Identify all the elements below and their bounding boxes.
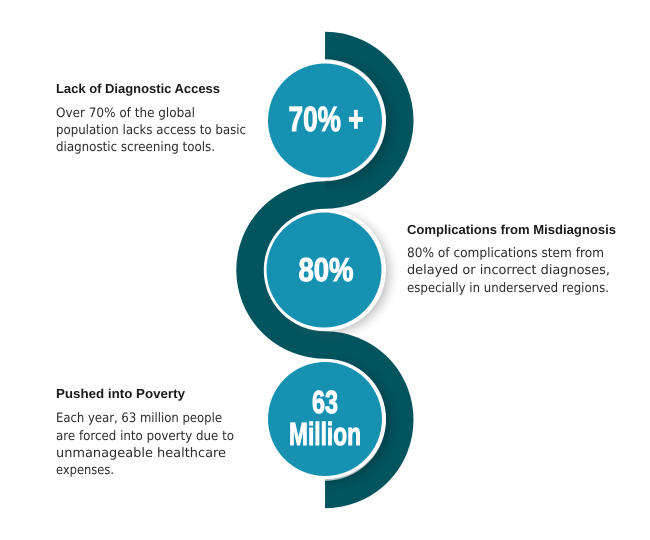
circle: 80% xyxy=(264,209,390,333)
text block: pushed into poverty xyxy=(56,386,234,478)
text block: complications from misdiagnosis: especially in underserved regions. xyxy=(407,281,609,296)
text block: lack of diagnostic access: Lack of Diagnostic Access xyxy=(56,81,220,96)
stat: 63 Million: 63 xyxy=(312,384,338,420)
text block: lack of diagnostic access: Over 70% of the global xyxy=(56,106,195,121)
text block: complications from misdiagnosis: 80% of complications stem from xyxy=(407,246,604,261)
text block: pushed into poverty: expenses. xyxy=(56,463,114,478)
text block: complications from misdiagnosis: Complications from Misdiagnosis xyxy=(407,222,616,237)
text block: pushed into poverty: Each year, 63 million people xyxy=(56,411,222,426)
text block: lack of diagnostic access xyxy=(56,81,246,155)
text block: pushed into poverty: Pushed into Poverty xyxy=(56,386,186,401)
text block: complications from misdiagnosis: delayed or incorrect diagnoses, xyxy=(407,263,610,278)
text block: lack of diagnostic access: diagnostic screening tools. xyxy=(56,140,215,155)
stat: 80%: 80% xyxy=(298,251,354,288)
infographic xyxy=(56,32,616,508)
circle: 63 million xyxy=(266,359,390,481)
serpentine ribbon xyxy=(250,46,400,494)
text block: complications from misdiagnosis xyxy=(407,222,616,296)
text block: pushed into poverty: are forced into poverty due to xyxy=(56,429,234,444)
stat: 63 Million: Million xyxy=(289,416,361,452)
text block: pushed into poverty: unmanageable healthcare xyxy=(56,446,226,461)
stat: 63 Million xyxy=(289,384,361,452)
text block: lack of diagnostic access: population lacks access to basic xyxy=(56,123,246,138)
stat: 70% +: 70% + xyxy=(288,100,364,139)
circle: 70% plus xyxy=(266,60,390,182)
